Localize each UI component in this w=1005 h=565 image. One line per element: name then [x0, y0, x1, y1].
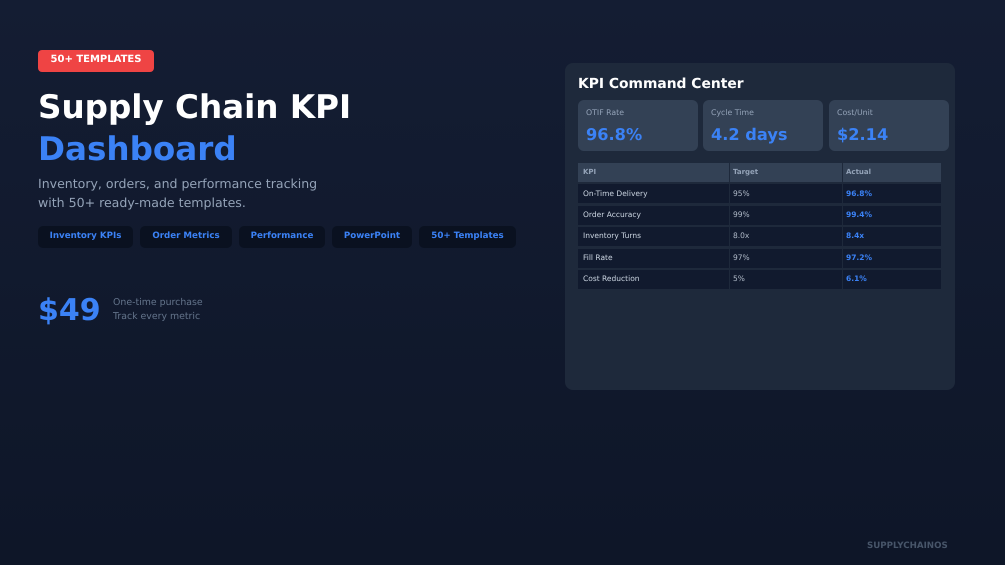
row: order accuracy: Order Accuracy [583, 210, 641, 219]
chip: performance [239, 226, 325, 248]
chip: inventory KPIs [38, 226, 133, 248]
row: fill rate: 97% [733, 253, 750, 262]
panel heading: KPI Command Center [578, 76, 744, 92]
row: order accuracy [578, 206, 941, 225]
badge: 50+ templates: 50+ TEMPLATES [51, 54, 141, 65]
KPI table [578, 163, 941, 289]
card: cycle time [703, 100, 823, 151]
brand footer: SUPPLYCHAINOS [867, 541, 948, 551]
chip: inventory KPIs: Inventory KPIs [50, 231, 121, 241]
card: cycle time: 4.2 days [711, 125, 788, 144]
card: OTIF rate: 96.8% [586, 125, 642, 144]
card: OTIF rate [578, 100, 698, 151]
table header: Target [733, 168, 758, 176]
row: cost reduction: 5% [733, 274, 745, 283]
price note: Track every metric [113, 311, 200, 322]
chip: 50+ templates [419, 226, 516, 248]
table header [578, 163, 941, 182]
price note: One-time purchase [113, 297, 203, 308]
card: OTIF rate: OTIF Rate [586, 108, 624, 117]
row: order accuracy: 99.4% [846, 210, 872, 219]
subtitle: with 50+ ready-made templates. [38, 195, 246, 210]
table header: Actual [846, 168, 871, 176]
subtitle: Inventory, orders, and performance tracking [38, 176, 317, 191]
card: cost per unit [829, 100, 949, 151]
subtitle [38, 176, 317, 210]
card: cost per unit: $2.14 [837, 125, 888, 144]
badge: 50+ templates [38, 50, 154, 72]
title: Supply Chain KPI [38, 88, 351, 126]
chip: performance: Performance [251, 231, 313, 241]
row: inventory turns: Inventory Turns [583, 231, 641, 240]
row: cost reduction [578, 270, 941, 289]
row: on-time delivery: 95% [733, 189, 750, 198]
table header: KPI [583, 168, 596, 176]
feature chips [38, 226, 516, 248]
row: fill rate: Fill Rate [583, 253, 613, 262]
price note [113, 297, 203, 322]
row: fill rate: 97.2% [846, 253, 872, 262]
chip: order metrics: Order Metrics [152, 231, 220, 241]
title: Dashboard [38, 130, 237, 168]
title [38, 88, 351, 168]
card: cost per unit: Cost/Unit [837, 108, 873, 117]
row: on-time delivery: 96.8% [846, 189, 872, 198]
price: $49 [38, 293, 101, 328]
row: cost reduction: Cost Reduction [583, 274, 640, 283]
panel: KPI command center [565, 63, 955, 390]
row: fill rate [578, 249, 941, 268]
row: inventory turns: 8.0x [733, 231, 749, 240]
row: on-time delivery [578, 184, 941, 203]
row: order accuracy: 99% [733, 210, 750, 219]
chip: PowerPoint [332, 226, 412, 248]
row: on-time delivery: On-Time Delivery [583, 189, 648, 198]
card: cycle time: Cycle Time [711, 108, 754, 117]
row: inventory turns [578, 227, 941, 246]
row: inventory turns: 8.4x [846, 231, 864, 240]
chip: 50+ templates: 50+ Templates [431, 231, 504, 241]
KPI cards [578, 100, 949, 151]
chip: order metrics [140, 226, 232, 248]
chip: PowerPoint: PowerPoint [344, 231, 400, 241]
row: cost reduction: 6.1% [846, 274, 867, 283]
